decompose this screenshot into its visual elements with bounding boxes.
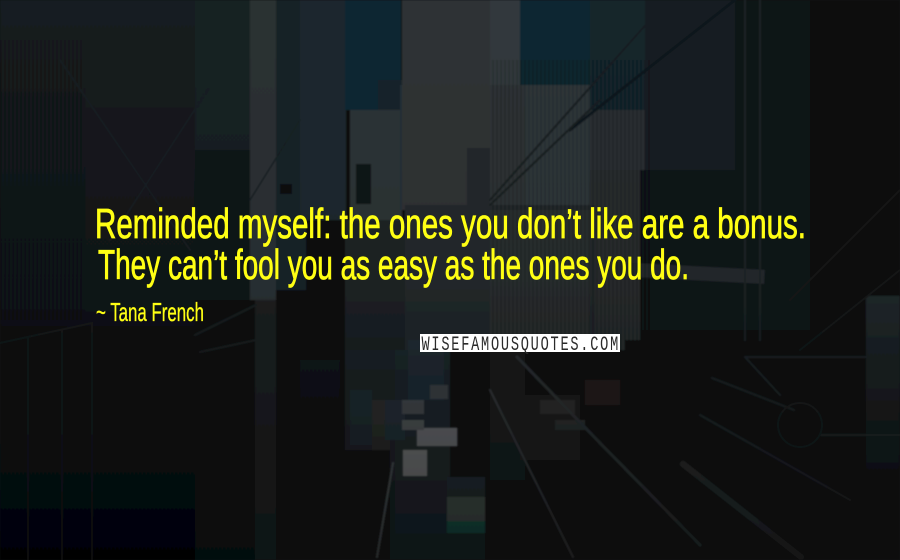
quote text — [95, 200, 806, 327]
watermark badge: WISEFAMOUSQUOTES.COM — [422, 335, 620, 357]
attribution: ~ Tana French — [96, 297, 204, 327]
